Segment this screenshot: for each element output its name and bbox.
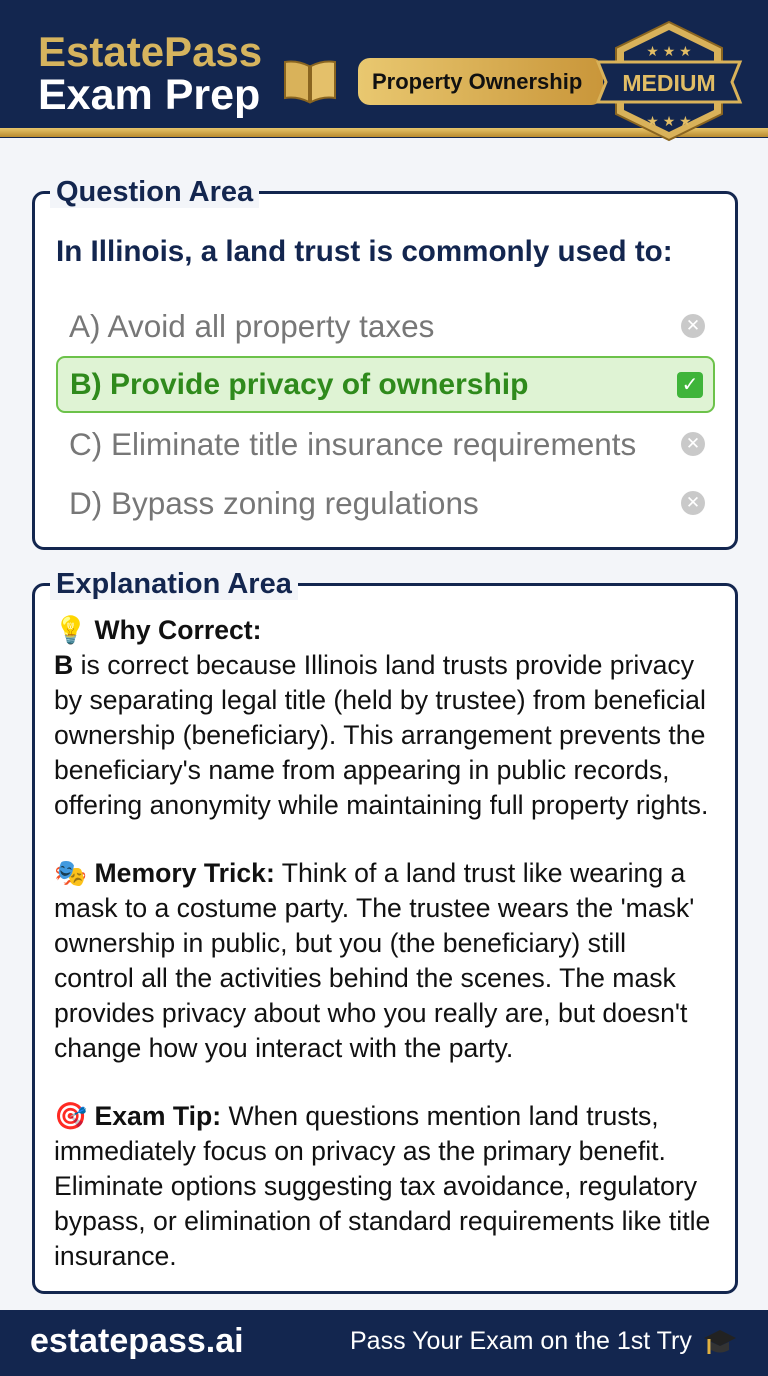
topic pill [358, 58, 603, 105]
option D: ✕ [686, 493, 700, 512]
explanation text: 🎯 Exam Tip: When questions mention land trusts, [54, 1101, 659, 1131]
badge: medium [596, 21, 742, 142]
explanation text: beneficiary's name from appearing in public records, [54, 755, 670, 785]
question text: In Illinois, a land trust is commonly used to: [56, 235, 673, 268]
explanation text: insurance. [54, 1241, 177, 1271]
option B correct: B) Provide privacy of ownership [70, 368, 528, 401]
explanation text: change how you interact with the party. [54, 1033, 513, 1063]
explanation text: ownership (beneficiary). This arrangement prevents the [54, 720, 705, 750]
option A: ✕ [686, 316, 700, 335]
explanation text: by separating legal title (held by trustee) from beneficial [54, 685, 706, 715]
icon: grad cap [704, 1330, 736, 1354]
option C: C) Eliminate title insurance requirements [69, 426, 636, 462]
badge: medium: ★ ★ ★ [646, 43, 692, 59]
option B correct [56, 356, 715, 413]
badge: medium: MEDIUM [622, 70, 716, 96]
option A [69, 308, 705, 344]
explanation text: 💡 Why Correct: [54, 615, 261, 645]
brand title: EstatePass [38, 28, 262, 75]
panel: explanation area [32, 583, 738, 1294]
topic pill: Property Ownership [372, 69, 582, 94]
badge: medium: ★ ★ ★ [646, 113, 692, 129]
heading: question area: Question Area [56, 176, 253, 208]
option C: ✕ [686, 434, 700, 453]
panel: question area [32, 191, 738, 550]
footer tagline: Pass Your Exam on the 1st Try [350, 1327, 692, 1355]
heading: explanation area: Explanation Area [56, 568, 292, 600]
brand title: Exam Prep [38, 71, 260, 119]
explanation text [54, 615, 710, 1271]
explanation text: control all the activities behind the scenes. The mask [54, 963, 676, 993]
explanation text: Eliminate options suggesting tax avoidance, regulatory [54, 1171, 697, 1201]
explanation text: 🎭 Memory Trick: Think of a land trust like wearing a [54, 858, 685, 888]
explanation text: B is correct because Illinois land trusts provide privacy [54, 650, 694, 680]
explanation text: immediately focus on privacy as the primary benefit. [54, 1136, 666, 1166]
option A: A) Avoid all property taxes [69, 308, 434, 344]
option D: D) Bypass zoning regulations [69, 485, 479, 521]
brand title [38, 28, 262, 119]
explanation text: provides privacy about who you really are, but doesn't [54, 998, 687, 1028]
footer url: estatepass.ai [30, 1322, 244, 1360]
explanation text: ownership in public, but you (the beneficiary) still [54, 928, 626, 958]
explanation text: mask to a costume party. The trustee wears the 'mask' [54, 893, 694, 923]
option D [69, 485, 705, 521]
header [0, 0, 768, 138]
icon: book [284, 60, 336, 104]
explanation text: offering anonymity while maintaining full property rights. [54, 790, 708, 820]
footer [0, 1310, 768, 1376]
explanation text: bypass, or elimination of standard requirements like title [54, 1206, 710, 1236]
option B correct: ✓ [682, 374, 698, 396]
